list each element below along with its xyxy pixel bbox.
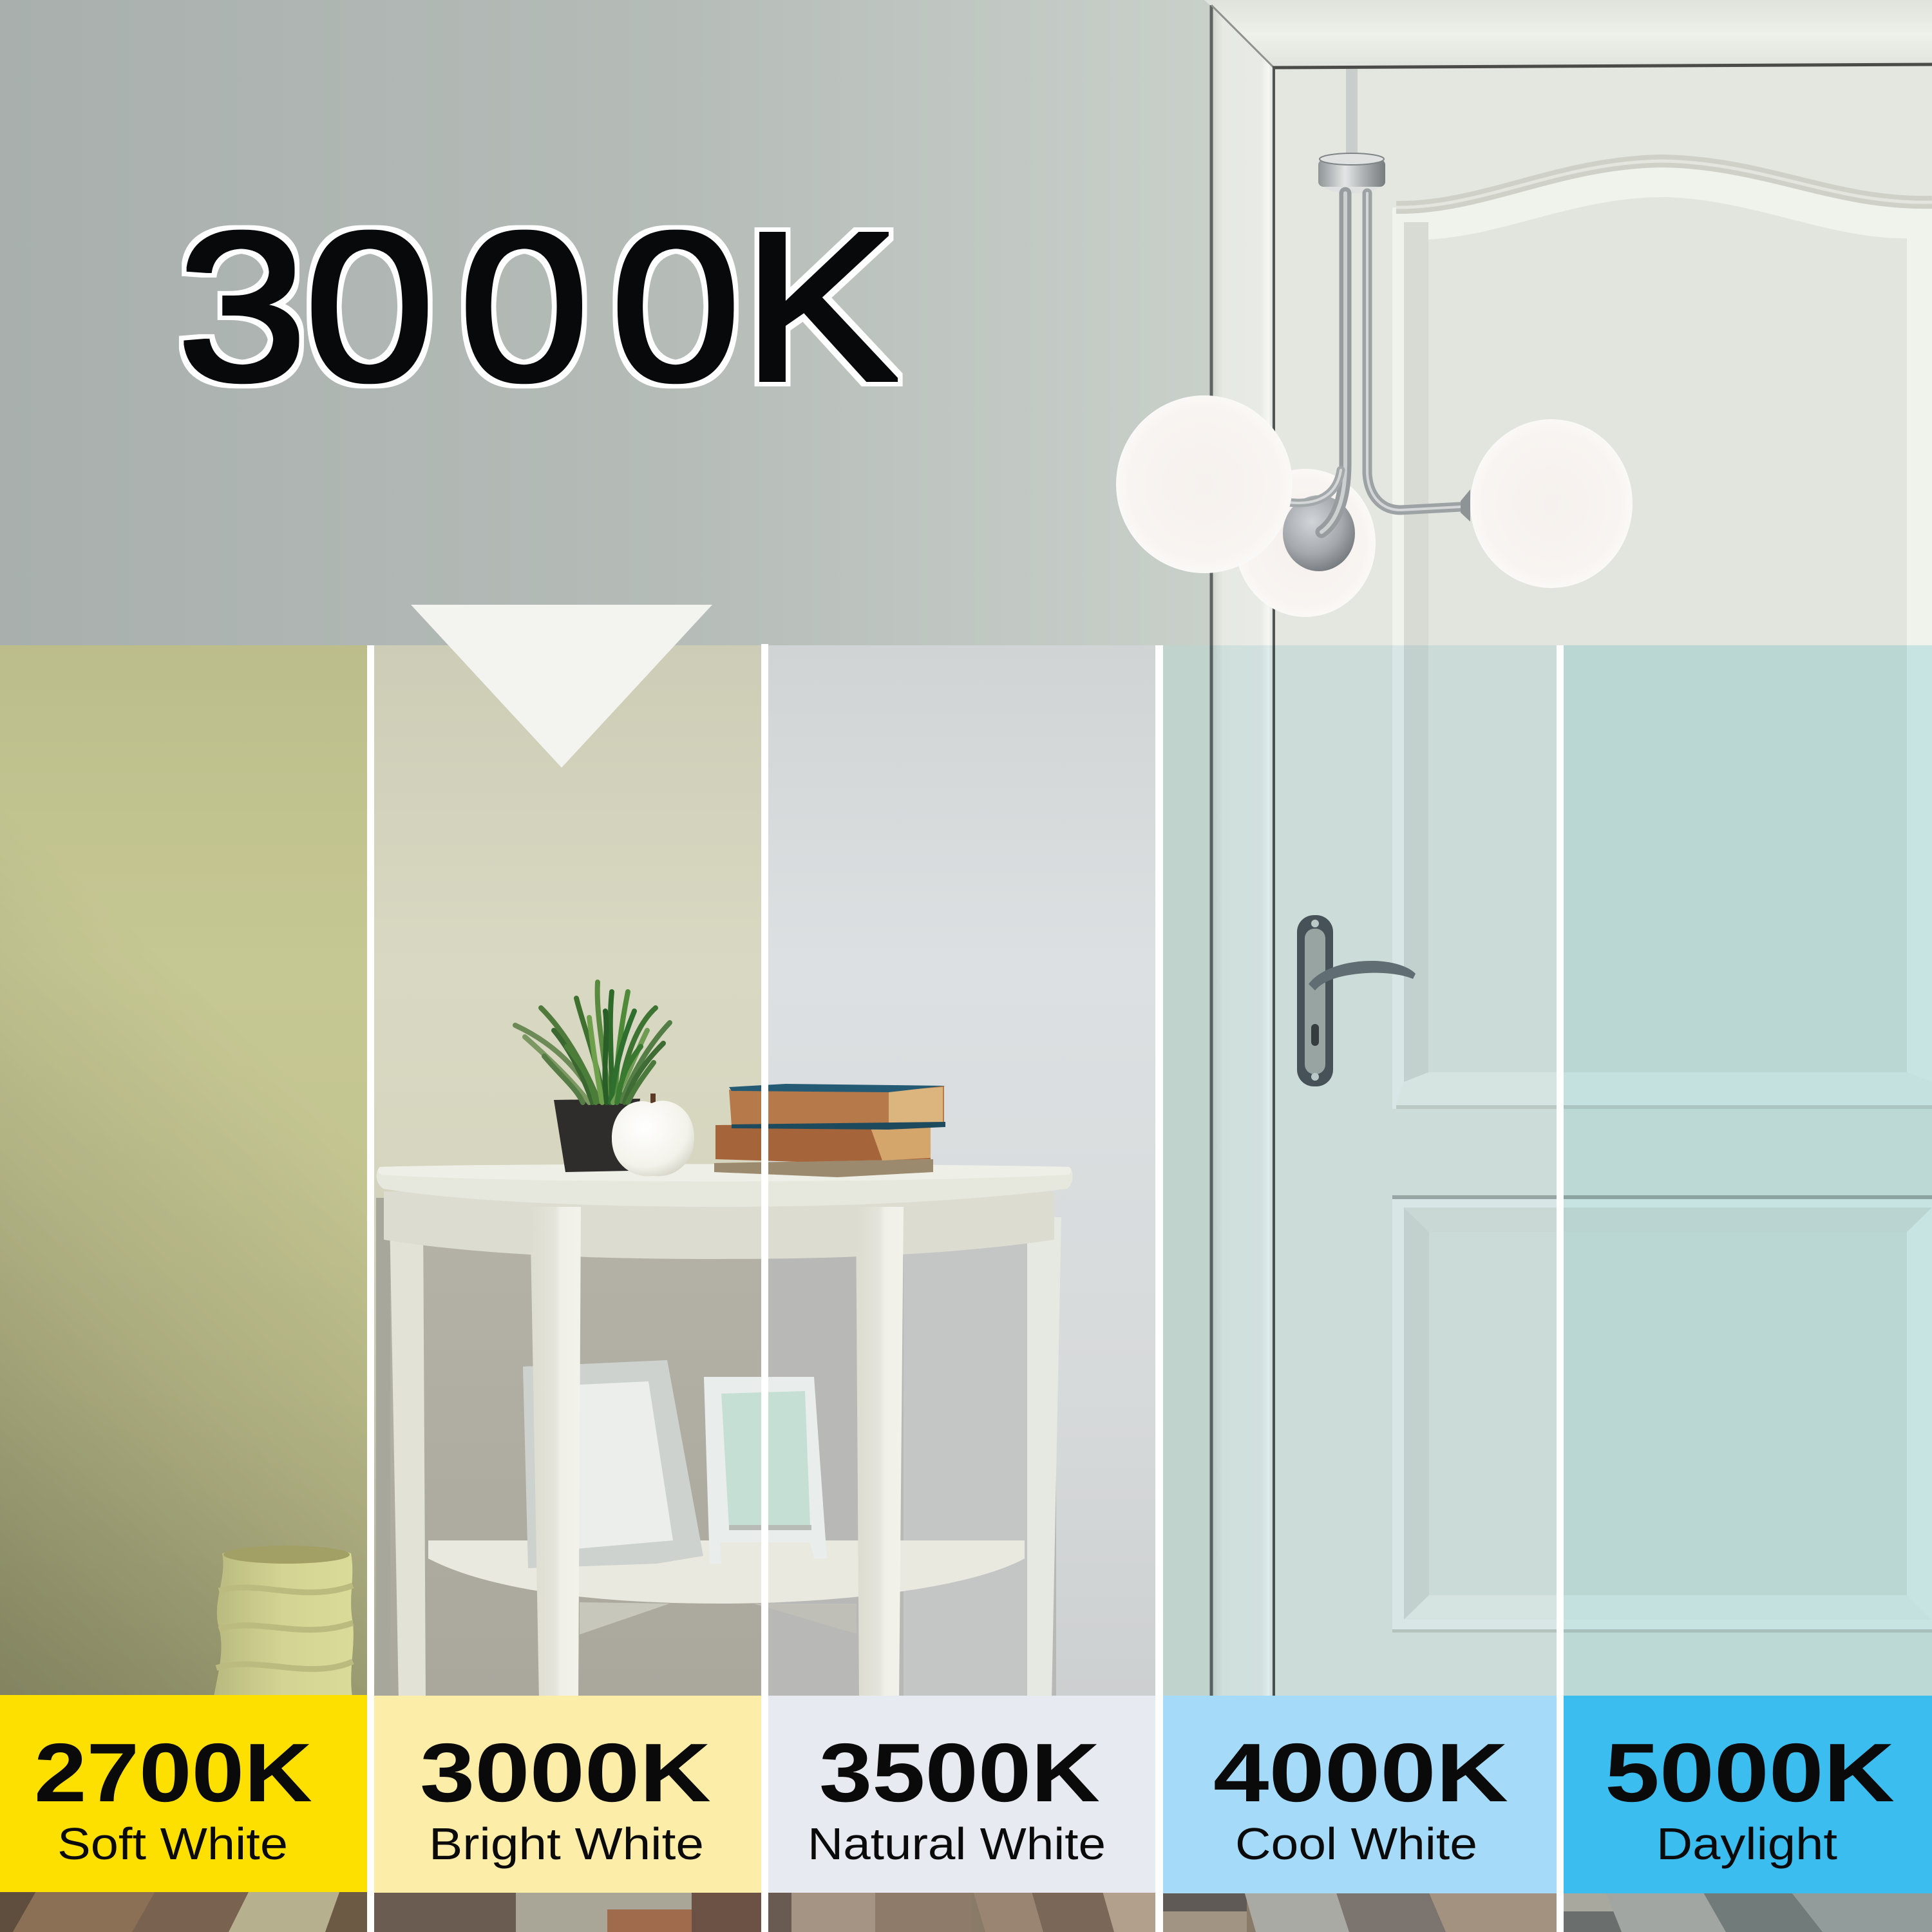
door panel: upper [1392, 160, 1932, 1109]
panel: 5000K Daylight: 5000K [1605, 1727, 1895, 1819]
door panel: lower [1392, 1195, 1932, 1633]
back legs [390, 1217, 1061, 1700]
panel: 5000K Daylight [1564, 1696, 1932, 1893]
colour temperature tint: 3000K [374, 645, 761, 1701]
background: wall [0, 0, 1211, 1701]
apron [384, 1191, 1054, 1259]
hub sphere [1283, 495, 1355, 571]
panel: 3000K Bright White: 3000K [420, 1727, 711, 1819]
door frame and door [1204, 0, 1932, 1700]
picture frame large [523, 1360, 703, 1568]
icon: stack of books [714, 1084, 945, 1177]
table back shadow area [386, 1224, 1056, 1700]
icon: ceiling light fixture [1116, 69, 1633, 617]
left globe [1116, 395, 1293, 573]
panel: 2700K Soft White: 2700K [34, 1727, 312, 1819]
console table [376, 982, 1073, 1700]
panel: 2700K Soft White [0, 1695, 367, 1892]
panel: 4000K Cool White: 4000K [1213, 1727, 1508, 1819]
icon: white apple [612, 1094, 694, 1176]
picture frame small [704, 1377, 827, 1564]
colour temperature tint: 2700K [0, 645, 367, 1701]
lower shelf [428, 1540, 1025, 1634]
colour temperature tint: 5000K [1564, 645, 1932, 1701]
panel: 3500K Natural White: Natural White [808, 1819, 1106, 1869]
front legs [530, 1207, 904, 1700]
middle globe [1235, 469, 1376, 617]
panel: 3000K Bright White: Bright White [429, 1819, 704, 1869]
table top [377, 1164, 1073, 1207]
icon: door handle [1297, 915, 1416, 1086]
panel: 3500K Natural White [768, 1696, 1155, 1893]
panel: 4000K Cool White [1163, 1696, 1557, 1893]
connector [1461, 489, 1470, 522]
arrow: downward pointer [411, 605, 712, 768]
arms [1288, 193, 1461, 532]
colour temperature tint: 4000K [1163, 645, 1557, 1701]
vase [213, 1546, 354, 1700]
icon: potted plant [515, 982, 670, 1172]
panel: 4000K Cool White: Cool White [1235, 1819, 1477, 1869]
panel: 5000K Daylight: Daylight [1656, 1819, 1837, 1869]
column divider lines [367, 644, 1564, 1932]
panel: 2700K Soft White: Soft White [57, 1819, 288, 1869]
panel: 3000K Bright White [374, 1696, 761, 1893]
heading: 3000K: 3000K [177, 187, 898, 425]
panel: 3500K Natural White: 3500K [819, 1727, 1100, 1819]
floor planks [0, 1887, 1932, 1932]
right globe [1470, 419, 1633, 588]
colour temperature tint: 3500K [768, 645, 1155, 1701]
rod and canopy [1318, 69, 1385, 193]
